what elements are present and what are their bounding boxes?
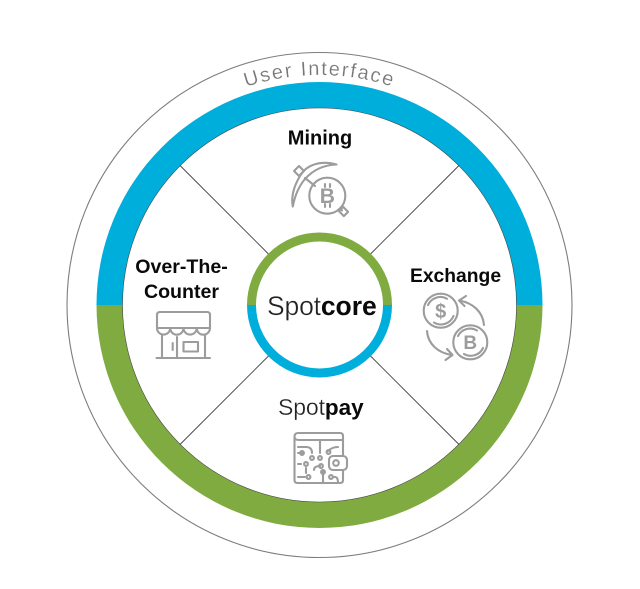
label: User Interface: User Interface [244,62,392,86]
centre label: Spotcore: Spotcore [267,291,377,321]
ring: green bottom half [96,305,542,528]
heading: Exchange: Exchange [410,266,501,287]
heading: Over-The-Counter: Counter [144,281,219,303]
centre ring [252,237,388,373]
icon: storefront [156,312,210,358]
inner disc outline [122,108,516,502]
icon: digital wallet [294,433,347,483]
heading: Spotpay: Spotpay [278,394,364,420]
icon: pickaxe with bitcoin: B [320,185,335,208]
outer circle: user interface boundary [67,52,572,558]
icon: currency exchange: B [463,333,477,354]
heading: Over-The-Counter [135,256,228,303]
heading: Mining: Mining [288,128,352,150]
icon: pickaxe with bitcoin [292,163,348,216]
quadrant divider lines [180,166,459,444]
icon: currency exchange [424,294,487,360]
ring: blue top half [96,82,542,305]
icon: currency exchange: $ [435,301,446,323]
heading: Over-The-Counter: Over-The- [135,256,228,278]
